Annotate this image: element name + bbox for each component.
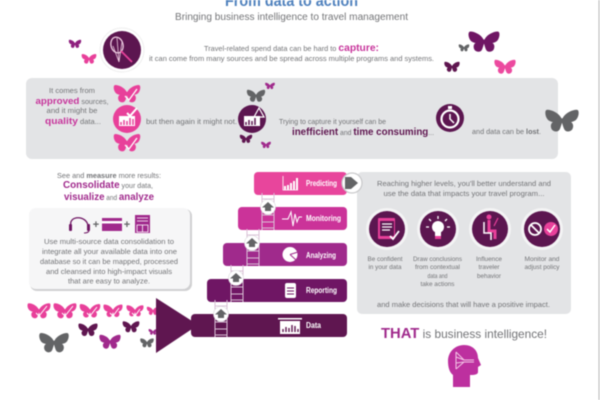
text: inefficient and time consuming [279, 117, 434, 138]
text: inefficient and time consuming: inefficient and time consuming... [292, 127, 434, 138]
funnel [156, 298, 192, 353]
icon: stopwatch [436, 104, 464, 132]
bar: data: Data [306, 321, 321, 330]
caption: be confident: in your data [368, 265, 402, 271]
intro text [149, 42, 434, 63]
arrow: predicting to outcomes [342, 173, 362, 193]
intro text: Travel-related spend data can be hard to capture: [204, 42, 379, 54]
caption: draw conclusions: Draw conclusions [413, 257, 462, 263]
caption: monitor policy [524, 257, 560, 271]
text: approved sources: approved sources, [36, 96, 109, 107]
consolidation text: Use multi-source data consolidation to [44, 239, 174, 246]
bar: reporting [207, 279, 347, 302]
icon: traveler [469, 208, 511, 250]
caption: influence behavior: traveler [478, 265, 500, 271]
bar: data [191, 314, 347, 337]
text: approved sources: and it might be [46, 108, 98, 115]
heading: consolidate: Consolidate your data, [63, 179, 153, 191]
consolidation text [40, 239, 178, 286]
caption: be confident: Be confident [368, 257, 403, 263]
caption: influence behavior: behavior [477, 274, 501, 280]
bar: predicting: Predicting [306, 179, 337, 188]
bar: predicting [254, 172, 347, 195]
subtitle: Bringing business intelligence to travel management [175, 12, 408, 23]
panel: multi-source consolidation [29, 208, 192, 291]
icons: headset, card, form [69, 215, 150, 233]
butterfly: lost data [545, 110, 579, 132]
page edge line [598, 0, 600, 400]
tagline: THAT is business intelligence! [381, 325, 547, 342]
intro text: it can come from many sources and be spread across multiple programs and systems. [149, 54, 434, 63]
panel intro text: use the data that impacts your travel program... [384, 189, 544, 198]
caption: draw conclusions: take actions [420, 282, 454, 288]
consolidation text: database so it can be mapped, processed [40, 259, 178, 266]
butterflies: top left [69, 40, 96, 64]
heading: consolidate [57, 171, 161, 203]
butterflies: raw data flow [27, 303, 159, 352]
consolidation text: integrate all your available data into one [42, 249, 177, 256]
heading: consolidate: See and measure more results: [57, 171, 161, 180]
panel closing text: and make decisions that will have a positive impact. [377, 300, 550, 309]
icon: butterfly net [100, 28, 144, 72]
caption: draw conclusions [413, 257, 462, 288]
icon: monitor policy [521, 208, 563, 250]
caption: draw conclusions: data and [428, 274, 448, 280]
bar: monitoring [238, 207, 347, 230]
panel: data capture problems [26, 78, 558, 159]
text: might not: but then again it might not. [146, 117, 237, 126]
text: data lost: and data can be lost. [472, 129, 541, 136]
caption: influence behavior: Influence [476, 257, 503, 263]
icon: lightbulb [417, 208, 459, 250]
caption: influence behavior [476, 257, 503, 280]
text: approved sources: quality data... [45, 116, 101, 127]
icon: be confident [366, 208, 408, 250]
bar: reporting: Reporting [306, 286, 337, 295]
heading: consolidate: visualize and analyze [64, 191, 154, 203]
bar: analyzing: Analyzing [306, 251, 336, 260]
bar: monitoring: Monitoring [306, 214, 341, 223]
butterflies: top right [444, 32, 516, 74]
icon: head with data [448, 345, 481, 387]
icon: warning data [238, 83, 275, 148]
ladders with up arrows [214, 193, 276, 337]
icons: headset, card, form: + [93, 219, 99, 231]
consolidation text: and cleansed into high-impact visuals [46, 269, 173, 276]
text: inefficient and time consuming: Trying to capture it yourself can be [279, 117, 386, 126]
panel intro text: Reaching higher levels, you'll better understand and [377, 179, 551, 188]
panel: business intelligence outcomes [357, 172, 571, 314]
icon: quality data [113, 85, 141, 151]
caption: be confident [368, 257, 403, 271]
icons: headset, card, form: + [124, 219, 130, 231]
text: approved sources [36, 88, 109, 127]
caption: draw conclusions: from contextual [415, 265, 460, 271]
caption: monitor policy: adjust policy [524, 265, 560, 271]
consolidation text: that are easy to analyze. [68, 278, 150, 286]
bar: analyzing [223, 243, 347, 266]
caption: monitor policy: Monitor and [524, 257, 560, 263]
text: approved sources: It comes from [49, 88, 95, 95]
panel intro text [377, 179, 551, 198]
